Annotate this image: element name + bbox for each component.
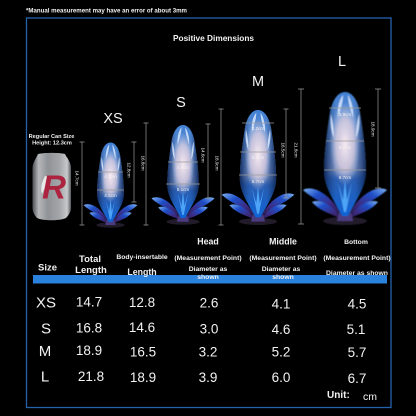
S label: S bbox=[176, 95, 186, 111]
row M bbox=[39, 343, 366, 360]
unit value: cm bbox=[363, 391, 377, 403]
header: size: Size bbox=[38, 262, 57, 274]
header: head: shown bbox=[197, 274, 219, 281]
XS dimension values: 14.7cm bbox=[74, 170, 80, 186]
header: middle: Middle bbox=[269, 236, 297, 246]
row M: 18.9 bbox=[76, 343, 102, 358]
row S bbox=[41, 320, 365, 338]
plant M bbox=[214, 74, 294, 225]
header: bottom: Bottom bbox=[344, 239, 368, 246]
row L: L bbox=[41, 368, 49, 386]
XS dimension lines bbox=[80, 142, 136, 225]
M dimension lines bbox=[218, 109, 288, 225]
row L: 6.7 bbox=[348, 371, 366, 386]
L dimension values: 3.9cm bbox=[339, 112, 351, 117]
L dimension values: 21.8cm bbox=[294, 142, 298, 158]
plant XS bbox=[74, 111, 137, 228]
white swoosh bbox=[41, 176, 50, 194]
unit label: Unit: bbox=[327, 390, 350, 401]
S dimension values: 14.6cm bbox=[200, 147, 206, 163]
row S: 4.6 bbox=[272, 322, 290, 337]
row L: 3.9 bbox=[199, 370, 217, 385]
L illustration bbox=[303, 92, 387, 225]
M dimension values: 5.7cm bbox=[252, 179, 264, 184]
heading: Positive Dimensions bbox=[173, 33, 254, 43]
L dimension values bbox=[294, 112, 376, 180]
row L: 6.0 bbox=[272, 370, 290, 385]
row M: 5.2 bbox=[272, 344, 290, 360]
can body bbox=[32, 153, 71, 220]
L dimension lines bbox=[298, 89, 381, 224]
row L: 18.9 bbox=[130, 370, 156, 385]
can caption: Regular Can Size bbox=[29, 134, 74, 140]
row S: 16.8 bbox=[76, 320, 102, 336]
header: middle: Diameter as bbox=[262, 266, 300, 273]
plant S bbox=[140, 95, 214, 225]
header: body-insertable length: Length bbox=[127, 267, 157, 277]
header: total length: Length bbox=[75, 265, 107, 276]
header: bottom: Diameter as shown bbox=[326, 270, 388, 277]
row XS bbox=[36, 294, 366, 312]
S dimension lines bbox=[144, 123, 210, 225]
row S: 5.1 bbox=[347, 322, 365, 337]
row S: S bbox=[41, 320, 51, 338]
table header band bbox=[33, 275, 387, 284]
red letter: R bbox=[42, 168, 66, 206]
header: bottom: (Measurement Point) bbox=[323, 255, 391, 262]
table header bbox=[38, 236, 391, 281]
can caption: Height: 12.3cm bbox=[32, 140, 72, 146]
table rows bbox=[36, 294, 366, 386]
row XS: 14.7 bbox=[76, 294, 102, 310]
row S: 14.6 bbox=[129, 320, 155, 335]
plant L bbox=[294, 54, 387, 225]
XS illustration bbox=[84, 142, 137, 228]
M dimension values bbox=[214, 126, 286, 184]
L dimension values: 6.7cm bbox=[339, 175, 351, 180]
row XS: XS bbox=[36, 294, 56, 312]
row S: 3.0 bbox=[200, 322, 218, 336]
row L bbox=[41, 368, 366, 386]
S illustration bbox=[152, 125, 214, 225]
header: middle: (Measurement Point) bbox=[249, 255, 317, 262]
reference can with caption bbox=[29, 134, 74, 220]
row XS: 12.8 bbox=[129, 295, 155, 310]
XS dimension values: 4.5cm bbox=[104, 193, 117, 198]
XS label: XS bbox=[103, 111, 123, 127]
row XS: 4.1 bbox=[272, 296, 290, 312]
unit note bbox=[327, 390, 377, 403]
S dimension values bbox=[140, 147, 206, 192]
header: total length: Total bbox=[79, 254, 101, 265]
row XS: 2.6 bbox=[200, 296, 218, 310]
M dimension values: 3.2cm bbox=[252, 126, 264, 131]
M illustration bbox=[222, 110, 294, 225]
M dimension values: 5.2cm bbox=[252, 155, 264, 160]
header: middle: shown bbox=[272, 274, 294, 281]
S dimension values: 5.1cm bbox=[177, 187, 189, 192]
L dimension values: 6.0cm bbox=[339, 145, 351, 150]
XS dimension values: 12.8cm bbox=[126, 162, 132, 178]
row M: 3.2 bbox=[199, 344, 217, 360]
L label: L bbox=[338, 54, 346, 70]
row L: 21.8 bbox=[78, 369, 104, 384]
S dimension values: 4.6cm bbox=[177, 165, 189, 170]
XS dimension values bbox=[74, 162, 132, 198]
row XS: 4.5 bbox=[348, 296, 366, 312]
M label: M bbox=[252, 74, 264, 90]
header: head: (Measurement Point) bbox=[174, 255, 242, 262]
XS dimension values: 4.1cm bbox=[104, 174, 117, 179]
header: head: Head bbox=[197, 236, 219, 246]
note: measurement error: *Manual measurement may have an error of about 3mm bbox=[26, 8, 187, 14]
row M: M bbox=[39, 343, 51, 360]
row M: 16.5 bbox=[130, 344, 156, 360]
M dimension values: 18.9cm bbox=[214, 155, 220, 171]
L dimension values: 18.9cm bbox=[370, 121, 376, 137]
header: body-insertable length: Body-insertable bbox=[116, 254, 168, 261]
row M: 5.7 bbox=[348, 345, 366, 360]
S dimension values: 16.8cm bbox=[140, 155, 146, 171]
header: head: Diameter as bbox=[189, 266, 227, 273]
M dimension values: 16.5cm bbox=[280, 142, 286, 158]
